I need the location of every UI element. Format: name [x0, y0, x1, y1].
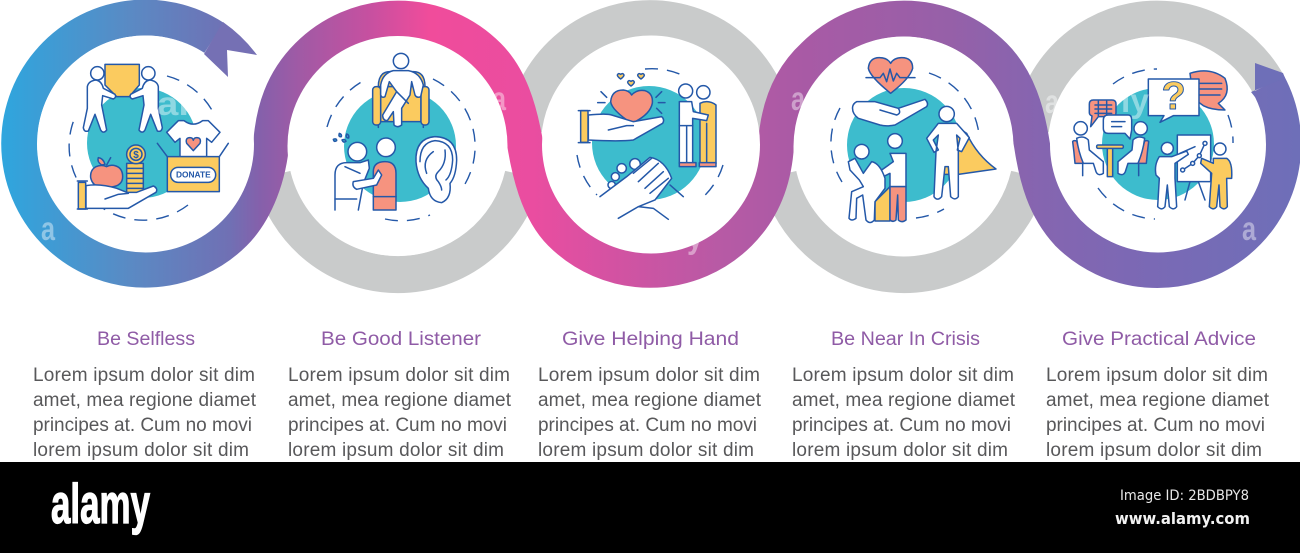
background rings: grey segments	[273, 18, 1268, 275]
body text: principes at. Cum no movi	[538, 415, 757, 436]
body text: principes at. Cum no movi	[288, 415, 507, 436]
body text: lorem ipsum dolor sit dim	[33, 440, 249, 461]
icon: give helping hand	[577, 69, 723, 219]
body text: Lorem ipsum dolor sit dim	[792, 365, 1014, 386]
watermark letters: y	[687, 218, 704, 255]
website: www.alamy.com	[1115, 509, 1250, 528]
watermark letters: al	[157, 85, 189, 122]
watermark letters: a	[791, 80, 805, 117]
body text: principes at. Cum no movi	[792, 415, 1011, 436]
black footer band	[0, 462, 1300, 553]
body text	[1046, 365, 1270, 461]
body text	[33, 365, 257, 461]
white circles behind the icons	[37, 36, 1266, 256]
column 2 text	[288, 329, 512, 461]
body text: Lorem ipsum dolor sit dim	[1046, 365, 1268, 386]
heading: give helping hand: Give Helping Hand	[562, 329, 739, 350]
body text: amet, mea regione diamet	[33, 390, 257, 411]
body text: Lorem ipsum dolor sit dim	[288, 365, 510, 386]
body text: lorem ipsum dolor sit dim	[792, 440, 1008, 461]
heading: be good listener: Be Good Listener	[321, 329, 482, 350]
column 5 text	[1046, 329, 1270, 461]
icon: be selfless: DONATE	[176, 170, 211, 180]
body text	[288, 365, 512, 461]
icon: be selfless: $	[133, 150, 139, 161]
icon: give practical advice: ?	[1162, 74, 1186, 118]
body text: lorem ipsum dolor sit dim	[538, 440, 754, 461]
icon: be near in crisis	[831, 58, 996, 222]
icon: be good listener	[327, 53, 475, 221]
body text	[538, 365, 762, 461]
icon: give practical advice	[1073, 69, 1233, 219]
image id: Image ID: 2BDBPY8	[1120, 488, 1249, 504]
body text: amet, mea regione diamet	[288, 390, 512, 411]
watermark letters: ly	[1121, 82, 1150, 119]
heading: give practical advice: Give Practical Advice	[1062, 329, 1256, 350]
body text: Lorem ipsum dolor sit dim	[538, 365, 760, 386]
watermark letters: a	[1242, 210, 1256, 247]
column 4 text	[792, 329, 1016, 461]
ribbon tail	[1251, 63, 1285, 97]
watermark letters	[41, 80, 1256, 255]
body text: lorem ipsum dolor sit dim	[1046, 440, 1262, 461]
body text: principes at. Cum no movi	[33, 415, 252, 436]
watermark letters: a	[492, 80, 506, 117]
body text: principes at. Cum no movi	[1046, 415, 1265, 436]
body text	[792, 365, 1016, 461]
icon: be selfless	[69, 64, 228, 220]
column 3 text	[538, 329, 762, 461]
heading: be near in crisis: Be Near In Crisis	[831, 329, 980, 350]
body text: amet, mea regione diamet	[792, 390, 1016, 411]
flowing gradient ribbon	[19, 18, 1283, 270]
body text: amet, mea regione diamet	[1046, 390, 1270, 411]
ribbon arrow head	[204, 22, 257, 77]
logo: alamy	[51, 472, 150, 535]
body text: amet, mea regione diamet	[538, 390, 762, 411]
body text: Lorem ipsum dolor sit dim	[33, 365, 255, 386]
watermark letters: a	[41, 210, 55, 247]
watermark letters: a	[1045, 83, 1059, 120]
body text: lorem ipsum dolor sit dim	[288, 440, 504, 461]
heading: be selfless: Be Selfless	[97, 329, 195, 350]
column 1 text	[33, 329, 257, 461]
